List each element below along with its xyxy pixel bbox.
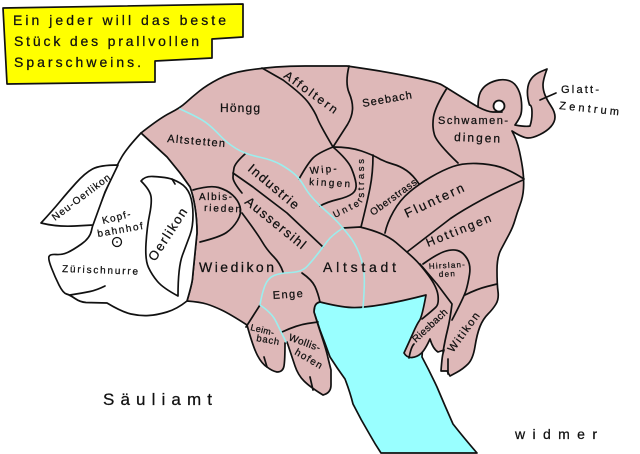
label: Oberstrass: Oberstrass xyxy=(368,177,419,218)
label: Affoltern: Affoltern xyxy=(281,68,340,116)
label: Kopfbahnhof xyxy=(97,209,144,240)
label: Wollishofen xyxy=(287,332,324,372)
label: Leimbach xyxy=(250,322,280,348)
label: Wipkingen: Wip- xyxy=(309,164,337,177)
label: Albisrieden: rieden xyxy=(204,203,241,215)
lake xyxy=(314,295,477,453)
label: Albisrieden: Albis- xyxy=(199,192,232,203)
label: Glattzentrum with leader: Zentrum xyxy=(559,100,620,118)
label: Fluntern: Fluntern xyxy=(402,180,466,221)
tail curl hole xyxy=(478,100,504,112)
label: Hirslanden: den xyxy=(439,269,455,279)
label: Glattzentrum with leader: Glatt- xyxy=(561,84,599,96)
label: Leimbach: Leim- xyxy=(250,322,275,338)
label: Hottingen: Hottingen xyxy=(424,211,493,250)
label: Riesbach: Riesbach xyxy=(411,307,450,345)
label: Altstadt: Altstadt xyxy=(323,259,396,275)
label: Glattzentrum with leader xyxy=(540,84,620,118)
label: Säuliamt: Säuliamt xyxy=(103,390,212,409)
title callout: Ein jeder will das beste xyxy=(13,12,226,28)
label: Höngg: Höngg xyxy=(220,101,260,115)
label: Wiedikon: Wiedikon xyxy=(199,259,274,275)
label: Aussersihl: Aussersihl xyxy=(242,194,309,252)
label: Enge: Enge xyxy=(272,288,303,302)
label: Widmer signature: widmer xyxy=(514,426,597,442)
label: Altstetten: Altstetten xyxy=(167,133,226,150)
title callout: Sparschweins. xyxy=(14,54,141,70)
label: Seebach: Seebach xyxy=(361,89,413,110)
mouth line xyxy=(70,286,105,295)
water boundaries xyxy=(180,109,364,342)
title callout: Stück des prallvollen xyxy=(14,33,199,49)
label: Wollishofen: Wollis- xyxy=(287,332,322,354)
label: Wipkingen xyxy=(309,164,350,190)
label: Schwamendingen xyxy=(438,115,508,146)
label: Wipkingen: kingen xyxy=(309,177,350,190)
pig body xyxy=(141,66,555,395)
ear: Neu-Oerlikon xyxy=(41,165,118,226)
ear: Oerlikon xyxy=(141,176,193,296)
title callout xyxy=(3,4,243,84)
label: Kopfbahnhof: Kopf- xyxy=(101,209,132,227)
label: Wollishofen: hofen xyxy=(292,347,324,372)
label: Oerlikon: Oerlikon xyxy=(145,205,190,264)
icon: station symbol xyxy=(112,238,122,246)
label: Hirslanden: Hirslan- xyxy=(429,260,465,271)
label: Albisrieden xyxy=(199,192,241,215)
label: Industrie: Industrie xyxy=(245,161,302,212)
label: Schwamendingen: dingen xyxy=(454,130,500,146)
label: Leimbach: bach xyxy=(255,333,280,348)
label: Zürischnurre: Zürischnurre xyxy=(62,264,139,278)
label: Schwamendingen: Schwamen- xyxy=(438,115,508,127)
label: Witikon: Witikon xyxy=(446,310,482,355)
label: Kopfbahnhof: bahnhof xyxy=(97,221,144,240)
pig head xyxy=(49,133,197,316)
label: Unterstrass: Unterstrass xyxy=(332,159,364,218)
label: Hirslanden xyxy=(429,260,465,279)
label: Neu-Oerlikon: Neu-Oerlikon xyxy=(50,172,113,223)
district boundaries xyxy=(172,66,524,390)
